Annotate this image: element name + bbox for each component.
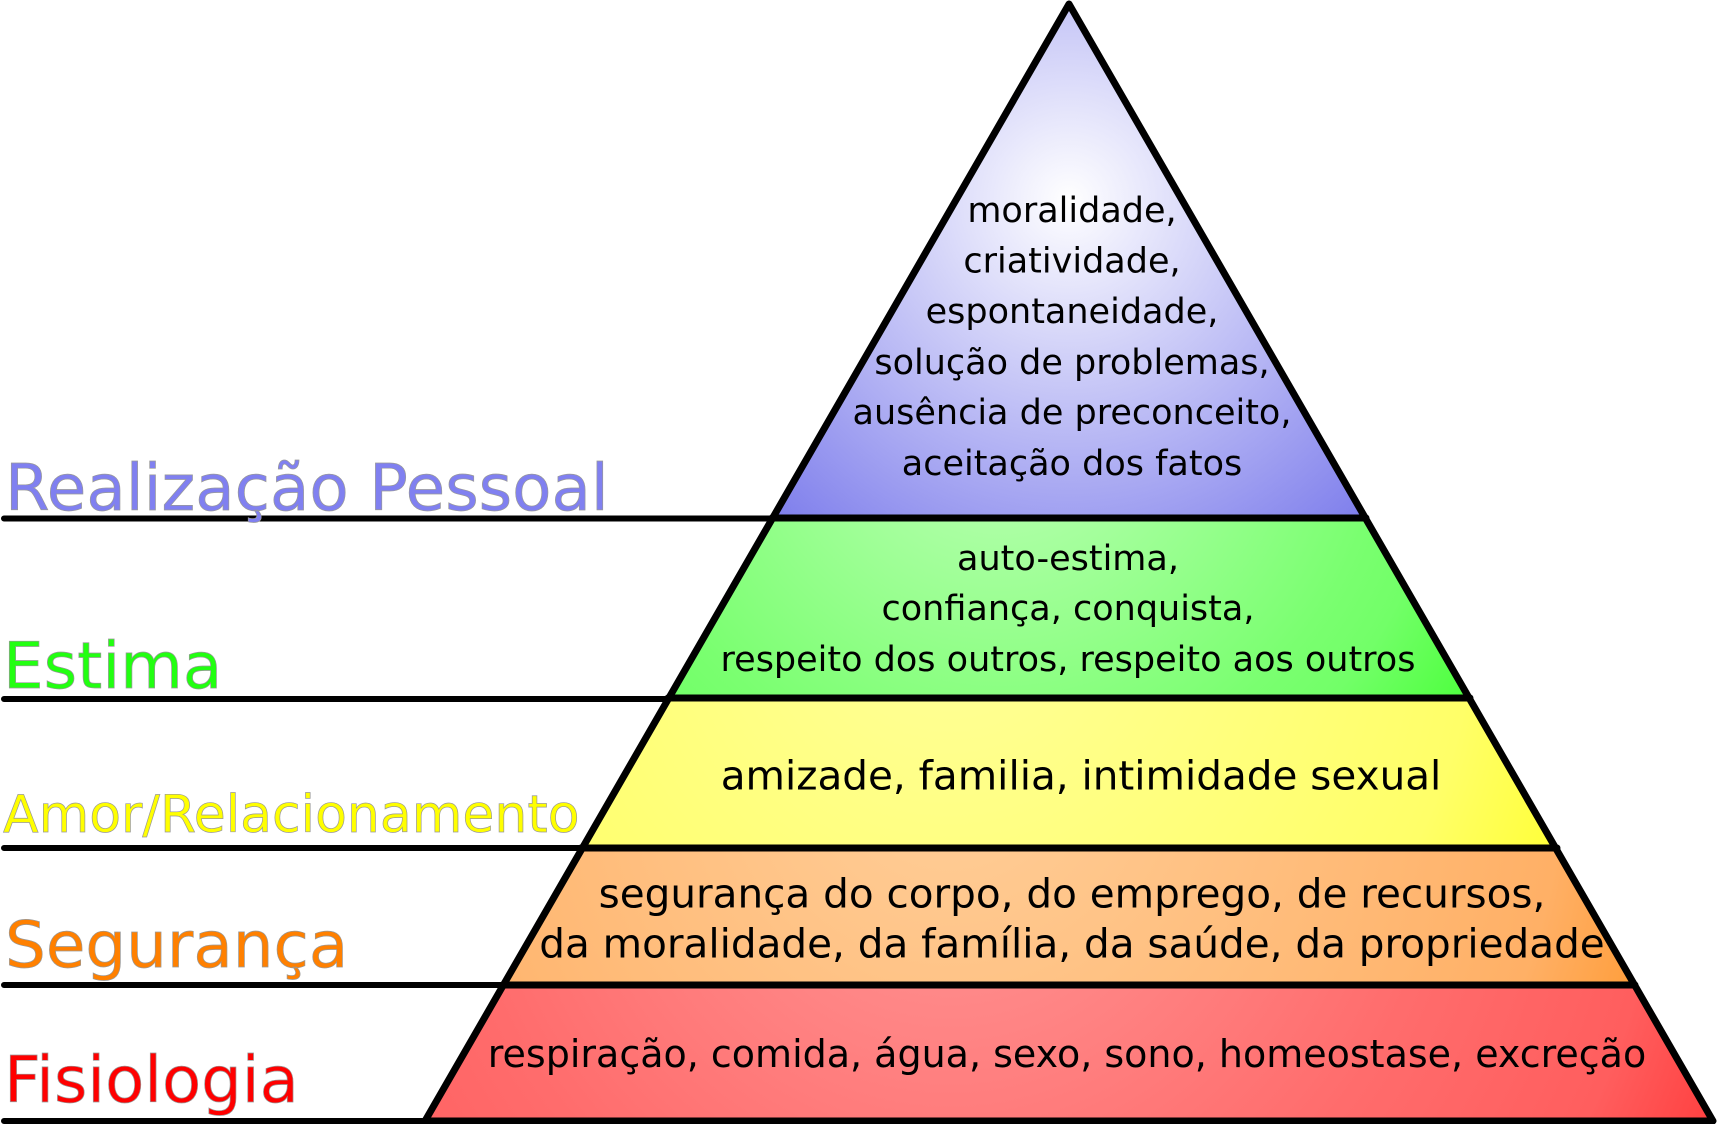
tier text: Realização Pessoal: espontaneidade, [926, 292, 1218, 332]
pyramid outline and tier dividers [425, 4, 1713, 1121]
tier text: Estima: respeito dos outros, respeito aos outros [721, 640, 1415, 680]
tier text: Realização Pessoal: moralidade, [967, 191, 1177, 231]
pyramid tier: Segurança [503, 848, 1635, 985]
tier text: Estima: auto-estima, [957, 539, 1179, 579]
pyramid tier: Estima [668, 518, 1470, 698]
heading: Amor/Relacionamento: Amor/Relacionamento [3, 785, 580, 845]
tier text: Realização Pessoal: ausência de preconceito, [853, 393, 1291, 433]
tier text: Amor/Relacionamento: amizade, familia, intimidade sexual [721, 752, 1441, 800]
tier text: Segurança: segurança do corpo, do emprego, de recursos, [599, 870, 1545, 918]
tier text: Estima [721, 539, 1415, 680]
tier text: Realização Pessoal [853, 191, 1291, 484]
tier text: Realização Pessoal: solução de problemas, [874, 343, 1270, 383]
tier text: Realização Pessoal: criatividade, [963, 242, 1181, 282]
tier text: Fisiologia: respiração, comida, água, sexo, sono, homeostase, excreção [488, 1032, 1646, 1076]
tier text: Realização Pessoal: aceitação dos fatos [902, 444, 1242, 484]
heading: Realização Pessoal: Realização Pessoal [5, 451, 609, 526]
tier text: Estima: confiança, conquista, [882, 589, 1254, 629]
heading: Estima: Estima [3, 629, 222, 704]
pyramid tier: Amor/Relacionamento [581, 698, 1557, 848]
tier text: Segurança: da moralidade, da família, da saúde, da propriedade [539, 920, 1605, 968]
heading: Segurança: Segurança [5, 908, 348, 983]
heading: Fisiologia: Fisiologia [4, 1044, 299, 1118]
level lines extending left [4, 518, 772, 1121]
pyramid tier: Realização Pessoal [772, 4, 1366, 518]
pyramid tier: Fisiologia [425, 985, 1713, 1121]
tier text: Segurança [539, 870, 1605, 968]
